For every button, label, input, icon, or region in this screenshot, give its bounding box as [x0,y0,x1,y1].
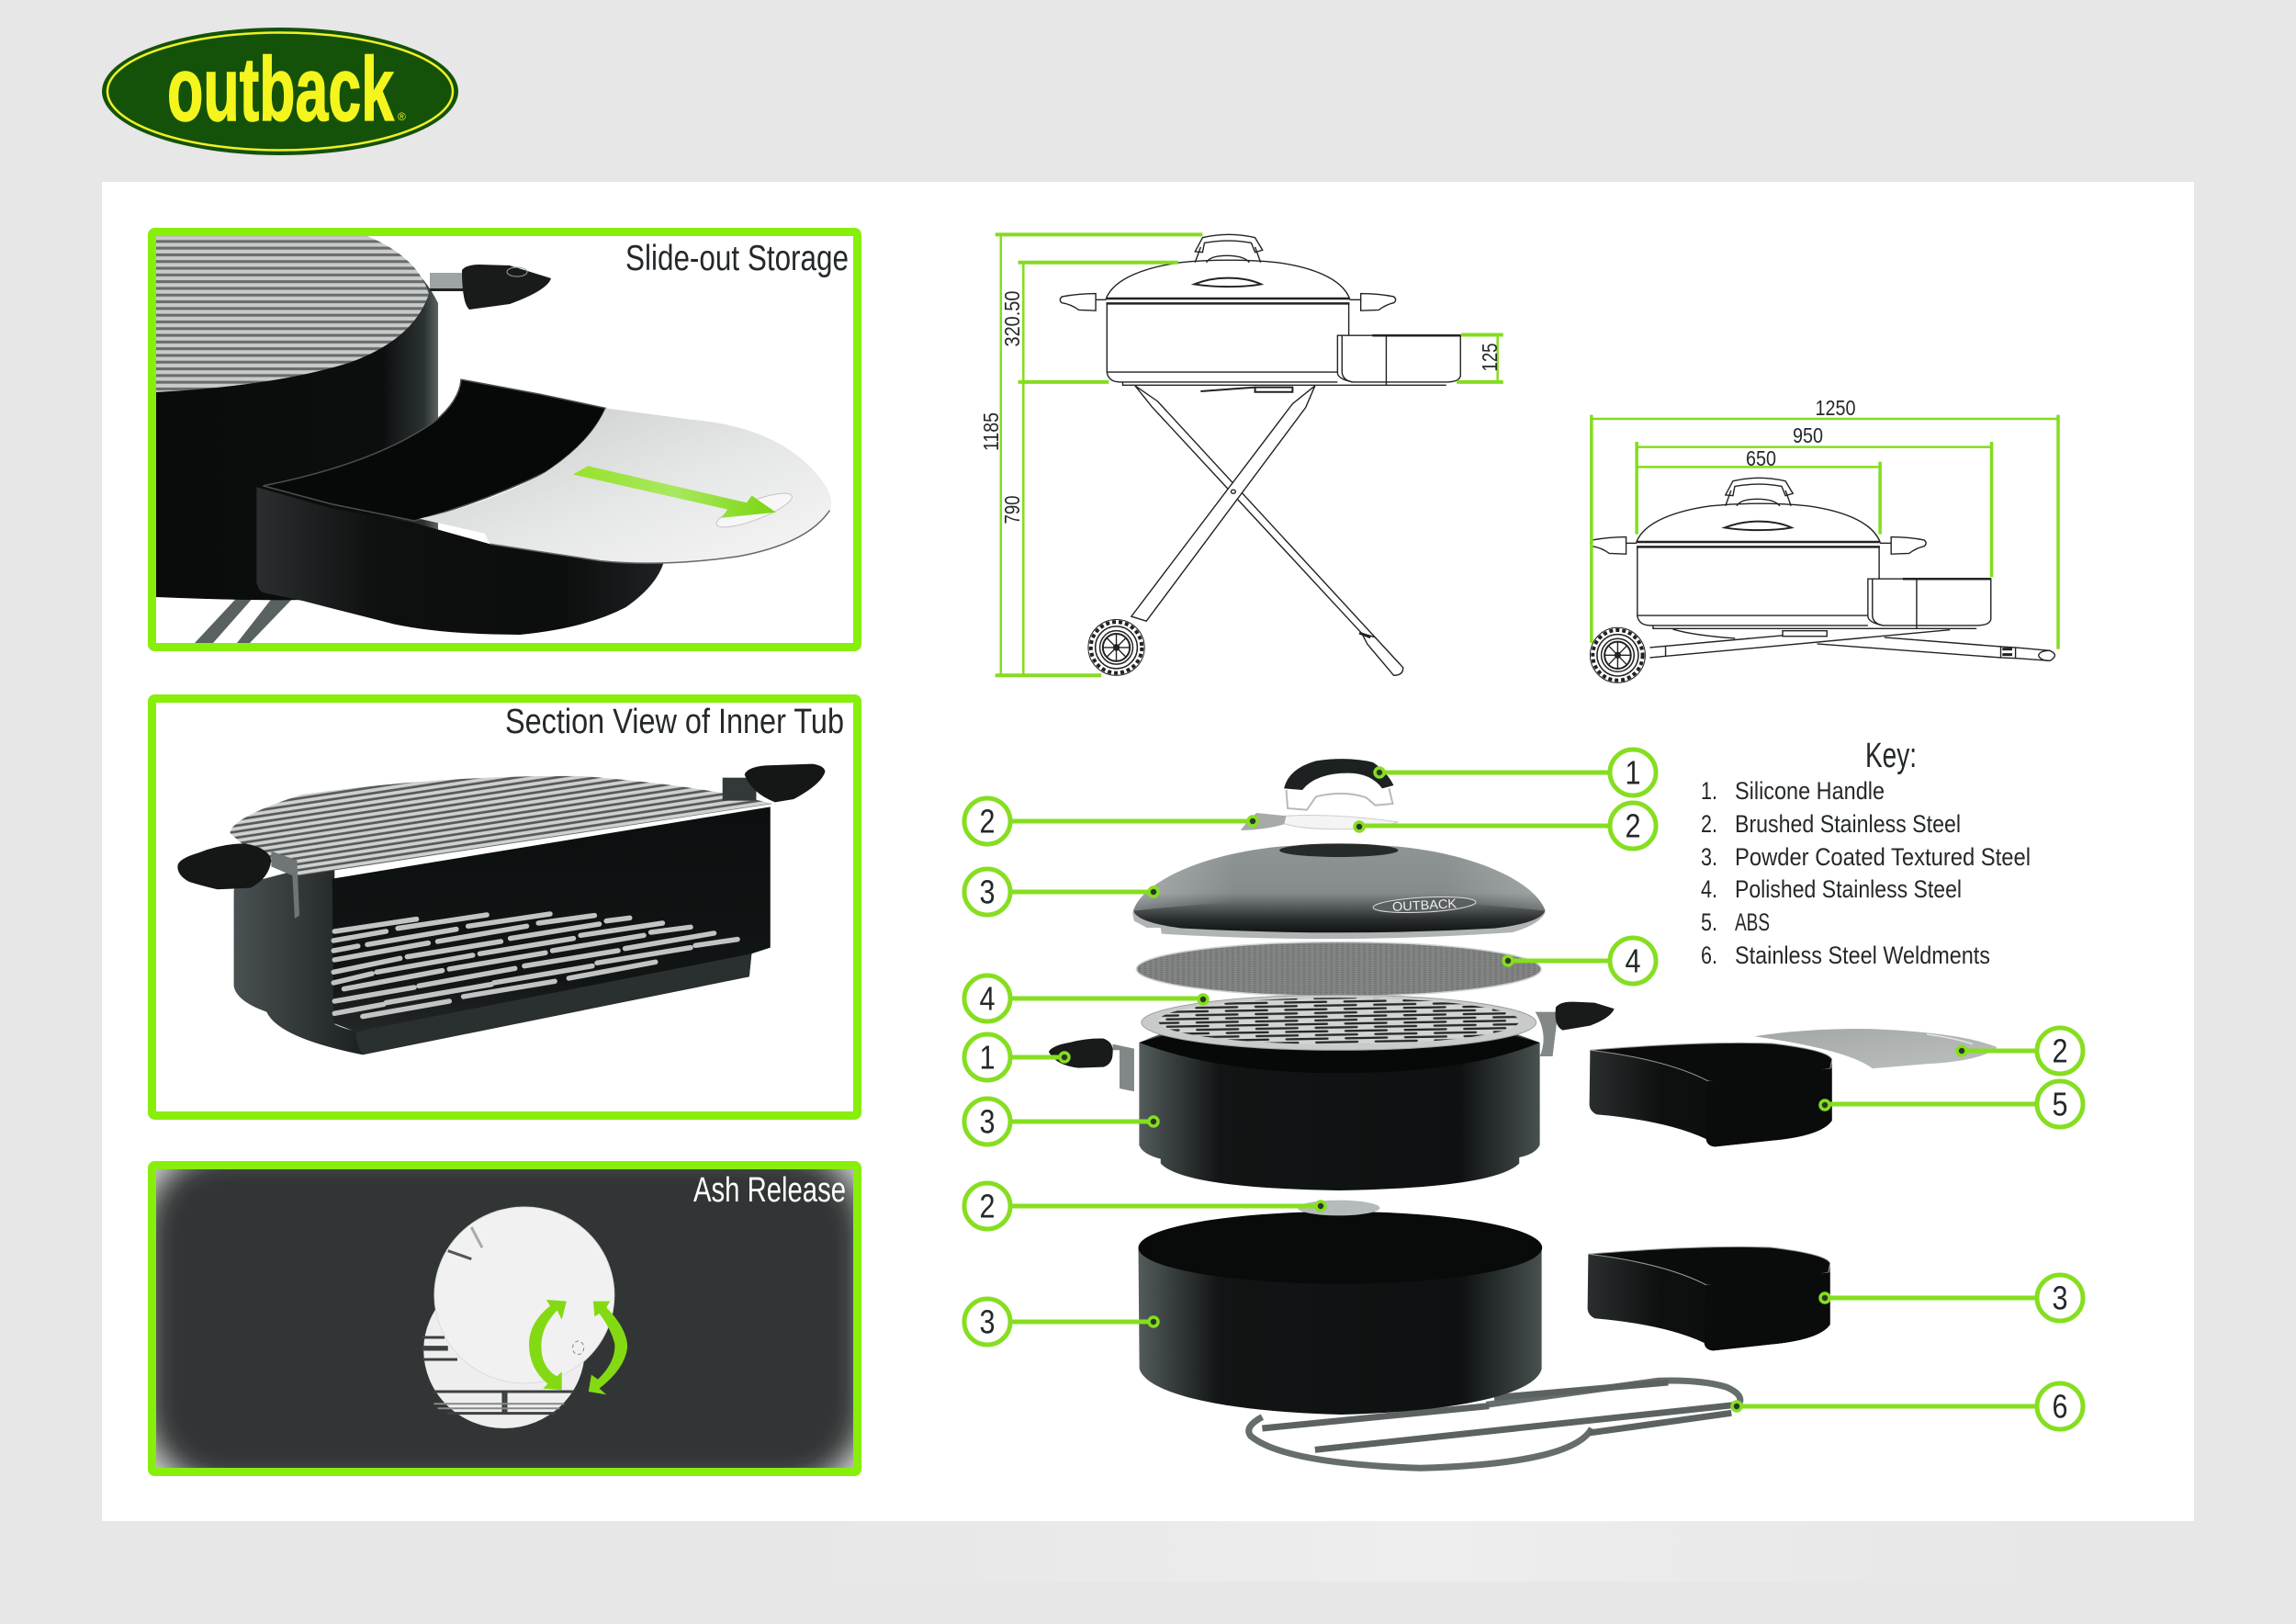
grate bars [422,1337,575,1414]
callout: 3 left, tub [964,1099,1158,1145]
lid dome [1132,843,1546,939]
callout: 2 left, damper [964,1183,1325,1229]
tub outer wall [234,870,363,1054]
side handle [430,265,551,310]
drawer: ABS [1590,1043,1832,1146]
grill line drawing [1060,234,1460,385]
frame [152,1165,858,1472]
key list: Powder Coated Textured Steel [1735,843,2031,871]
panel: ash release [145,1150,865,1487]
ash lip [355,953,751,1054]
diagram: folded elevation with width dimensions [1590,396,2058,682]
dimension labels [1746,396,1855,470]
key list: Stainless Steel Weldments [1735,942,1990,969]
key [1701,737,2031,969]
key list: 4. [1701,875,1717,903]
lower tub body [1139,995,1540,1190]
callout: 2 left, vent plate [964,798,1257,844]
callout: 3 left, outer tub [964,1299,1158,1345]
arrow: rotate right [589,1302,627,1394]
logo: outback: outback [167,39,394,140]
top handle [1284,759,1393,810]
callout: 1 left, side handle [964,1034,1069,1080]
callout: 2 right, vent plate [1355,803,1656,849]
heading: Slide-out Storage [625,239,849,278]
lid badge: OUTBACK [1392,896,1458,914]
grill line drawing [1591,478,1991,628]
damper disc [1298,1201,1379,1215]
panel: section view of inner tub [152,698,858,1115]
key list: 5. [1701,908,1717,936]
crossed legs [1088,386,1403,675]
key list: 3. [1701,843,1717,871]
dimension labels: 1250 [1815,396,1855,420]
left handle [177,843,299,919]
callout: 3 right, lower drawer [1820,1275,2083,1321]
lower ash disc [423,1272,585,1428]
top grill [231,776,772,875]
base frame weldment [1249,1381,1740,1468]
panel: slide-out storage [152,231,858,647]
callout: 6 right, weldment: 6 [2052,1387,2068,1426]
vent plate [1241,813,1398,830]
callout: 5 right, drawer: 5 [2052,1086,2068,1122]
callout: 3 right, lower drawer: 3 [2052,1279,2068,1317]
dimension labels: 790 [1000,496,1024,524]
pivot [572,1341,584,1355]
side handles [1049,1002,1615,1091]
lid badge [1373,895,1476,915]
drawer: powder coated [1588,1246,1830,1350]
upper ash disc [434,1207,614,1383]
dimension labels: 650 [1746,446,1776,470]
callout: 6 right, weldment [1732,1383,2083,1429]
key list: 1. [1701,777,1717,805]
key list: Silicone Handle [1735,777,1885,805]
callout: 4 left, grate: 4 [979,979,996,1018]
dimension labels: 950 [1793,423,1823,447]
logo: outback: ® [398,110,406,123]
callout: 4 right, mesh plate [1503,938,1656,984]
grate [1142,995,1536,1050]
callout: 4 left, grate [964,976,1208,1021]
dimension labels: 320.50 [1000,290,1024,347]
exploded view: grill parts [1049,759,1998,1468]
mesh plate [1136,942,1541,996]
callout: 1 right, top handle [1375,750,1656,795]
frame [152,231,858,647]
callout: 3 left, lid [964,869,1158,915]
tub body [156,277,438,601]
dimension labels: 125 [1478,344,1502,371]
wheel [1088,619,1144,675]
callout: 2 right, tray [1957,1028,2083,1074]
lower grate slats [333,914,737,1017]
heading: Ash Release [693,1171,846,1210]
right handle [723,764,825,802]
dimension labels [979,290,1502,524]
callout: 1 right, top handle: 1 [1626,753,1640,792]
tub interior [332,806,771,1054]
arrow: slide direction [573,466,776,518]
key list [1701,777,2031,969]
heading: Section View of Inner Tub [505,703,844,741]
callout: 2 right, tray: 2 [2052,1032,2068,1069]
key list: 2. [1701,810,1717,838]
callout: 1 left, side handle: 1 [979,1038,996,1077]
key list: Polished Stainless Steel [1735,875,1962,903]
width dimensions [1592,415,2058,649]
key list: ABS [1735,908,1770,936]
callout: 2 right, vent plate: 2 [1626,806,1640,845]
frame [152,698,858,1115]
dimension labels: 1185 [979,412,1003,451]
stand legs [195,599,292,643]
slide-out tray plate [420,408,831,563]
callout: 4 right, mesh plate: 4 [1626,942,1640,979]
grill surface [156,236,429,392]
outer tub [1139,1212,1542,1415]
tray plate [1754,1029,1998,1068]
key list: Brushed Stainless Steel [1735,810,1961,838]
logo: outback [102,28,458,155]
white content panel [102,182,2194,1521]
folded legs and wheel [1590,627,2054,682]
callout: 2 left, vent plate: 2 [979,803,996,840]
height dimensions [996,234,1503,675]
key list: 6. [1701,942,1717,969]
callout: 2 left, damper: 2 [979,1187,996,1225]
key heading: Key: [1865,737,1917,775]
drawer [256,379,831,635]
callout: 5 right, drawer [1820,1081,2083,1127]
callout: 3 left, lid: 3 [979,873,996,911]
diagram: side elevation with height dimensions [979,234,1503,675]
callout: 3 left, outer tub: 3 [979,1303,996,1341]
callout: 3 left, tub: 3 [979,1102,996,1141]
arrow: rotate left [529,1300,567,1390]
